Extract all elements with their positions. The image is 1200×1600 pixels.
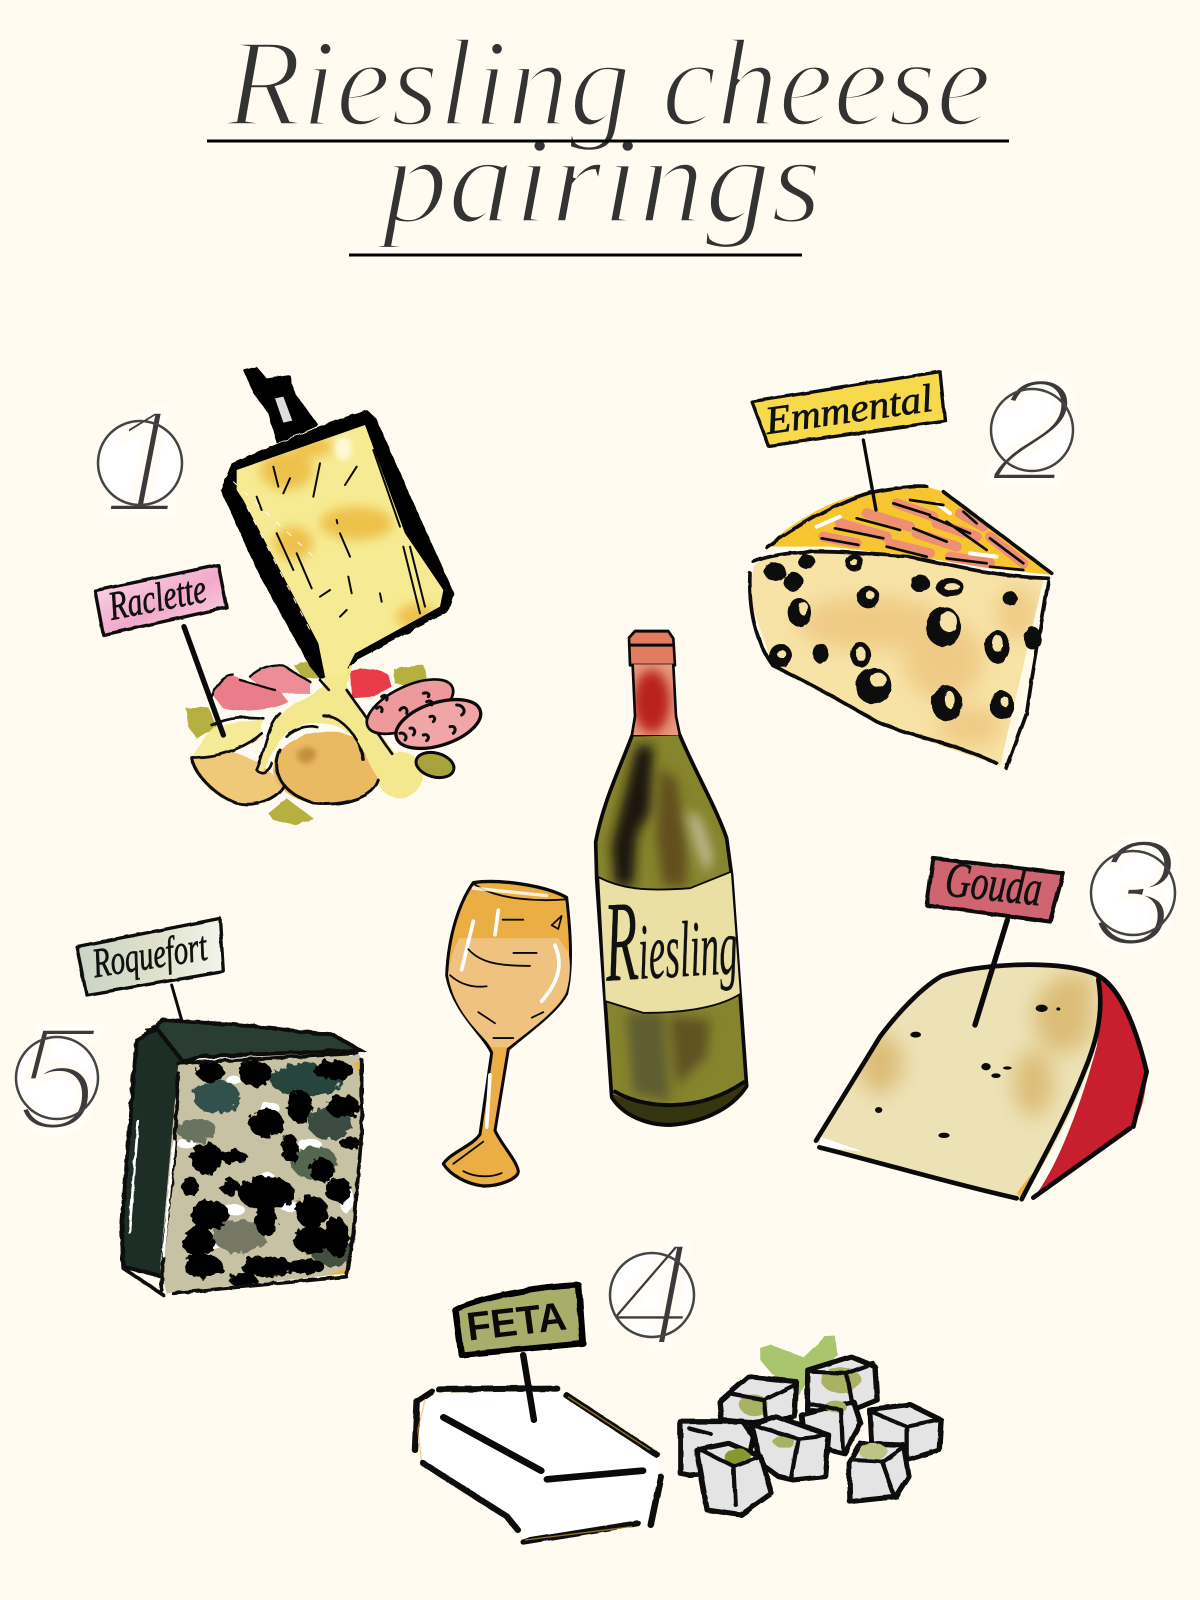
number 2 badge: 2: [989, 346, 1073, 514]
glass ink details: [450, 883, 567, 1176]
cheese 4: feta: [414, 1285, 941, 1543]
glass shape: [443, 882, 571, 1186]
title underline 1: [207, 140, 1009, 142]
bottle neck: [630, 645, 680, 737]
emmental sign stick: [863, 440, 876, 510]
potatoes: [192, 716, 423, 805]
gouda label: Gouda: [943, 851, 1045, 916]
raclette sign stick: [184, 627, 223, 735]
emmental top rind: [767, 487, 1053, 575]
gouda sign: [927, 851, 1063, 922]
raclette pan handle: [243, 367, 318, 443]
gouda sign stick: [975, 920, 1007, 1025]
title text: pairings: [374, 112, 822, 250]
wine liquid: [448, 938, 570, 1047]
feta block: [414, 1389, 661, 1543]
raclette sign: [95, 565, 227, 635]
roquefort outlines: [122, 1053, 362, 1295]
gouda face: [817, 965, 1100, 1200]
cheese 2: emmental: [750, 372, 1053, 768]
roquefort left side: [122, 1028, 182, 1277]
ham slices: [212, 665, 392, 711]
title text: Riesling cheese: [225, 15, 991, 153]
cheese 1: raclette: [95, 367, 487, 825]
roquefort front: [122, 1053, 362, 1295]
salami: [359, 668, 487, 782]
roquefort label: Roquefort: [89, 924, 211, 987]
handle highlight: [275, 397, 292, 423]
cube edges: [689, 1363, 939, 1505]
wine glass: [443, 882, 571, 1186]
emmental holes: [764, 554, 1041, 721]
raclette pan: [221, 409, 454, 680]
bottle label: [598, 872, 741, 1013]
number 1 badge: 1: [102, 377, 185, 545]
riesling label text: Riesling: [601, 872, 740, 1006]
feta leaf: [761, 1336, 838, 1395]
roquefort top: [148, 1020, 360, 1063]
gouda outlines: [816, 965, 1147, 1199]
number 3 badge: 3: [1090, 806, 1176, 979]
cube moss patches: [725, 1367, 887, 1466]
raclette label: Raclette: [104, 566, 210, 629]
bottle capsule: [629, 631, 675, 665]
emmental label: Emmental: [761, 376, 935, 443]
gouda specks: [875, 1005, 1060, 1138]
feta sign stick: [523, 1355, 534, 1420]
cheese 5: roquefort: [77, 918, 362, 1295]
emmental sign: [752, 372, 945, 446]
feta sign: [455, 1285, 583, 1355]
bottle body: [596, 735, 747, 1138]
white veins: [177, 1076, 353, 1249]
roquefort sign: [77, 918, 223, 995]
title: [207, 15, 1022, 256]
feta label: FETA: [464, 1293, 569, 1349]
black mould: [181, 1060, 360, 1287]
number 5 badge: 5: [15, 994, 99, 1162]
gouda rind: [1033, 972, 1147, 1198]
emmental body: [750, 487, 1052, 768]
green-grey mould: [177, 1063, 355, 1267]
melted cheese: [192, 647, 400, 780]
glass highlights: [462, 910, 559, 1127]
number 4 badge: 4: [610, 1210, 693, 1378]
roquefort sign stick: [172, 985, 182, 1020]
greens under raclette: [186, 662, 427, 825]
title underline 2: [349, 254, 802, 256]
feta cubes: [680, 1357, 941, 1515]
cheese 3: gouda: [816, 851, 1147, 1200]
wine bottle: [596, 631, 747, 1138]
